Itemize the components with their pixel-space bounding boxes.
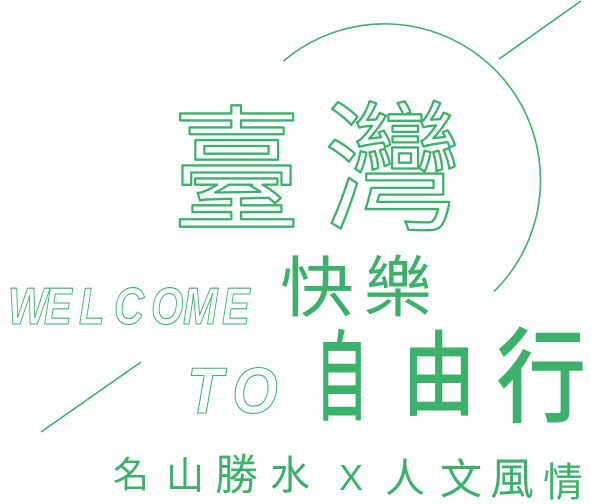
decorative arc around title bbox=[284, 24, 541, 292]
heading: 自由行: 由 bbox=[402, 324, 476, 428]
diagonal line bottom left bbox=[41, 362, 141, 432]
subtitle: 名山勝水 X 人文風情: 名 bbox=[113, 454, 149, 495]
title: outlined 臺灣 bbox=[172, 91, 461, 249]
subtitle: 名山勝水 X 人文風情: 山 bbox=[166, 456, 204, 498]
heading: 快樂: 樂 bbox=[364, 251, 432, 326]
title: outlined 臺灣: 臺 bbox=[172, 96, 301, 248]
heading: 自由行: 自 bbox=[315, 324, 368, 433]
heading: 快樂: 快 bbox=[280, 252, 354, 325]
subtitle: 名山勝水 X 人文風情: 風 bbox=[490, 455, 534, 504]
subtitle: 名山勝水 X 人文風情: 情 bbox=[543, 461, 583, 504]
subtitle: 名山勝水 X 人文風情: X bbox=[339, 457, 363, 498]
title: outlined 臺灣: 灣 bbox=[324, 91, 461, 249]
heading: 自由行 bbox=[315, 320, 586, 436]
subtitle: 名山勝水 X 人文風情: 文 bbox=[440, 456, 482, 503]
heading: TO: TO bbox=[187, 355, 278, 428]
subtitle: 名山勝水 X 人文風情: 人 bbox=[385, 457, 425, 501]
subtitle: 名山勝水 X 人文風情: 水 bbox=[270, 454, 310, 498]
subtitle: 名山勝水 X 人文風情: 勝 bbox=[215, 452, 258, 500]
subtitle: 名山勝水 X 人文風情 bbox=[113, 452, 583, 504]
heading: 自由行: 行 bbox=[496, 320, 586, 436]
heading: WELCOME: WELCOME bbox=[8, 277, 251, 335]
diagonal line top right bbox=[499, 1, 581, 59]
heading: 快樂 bbox=[280, 251, 432, 326]
